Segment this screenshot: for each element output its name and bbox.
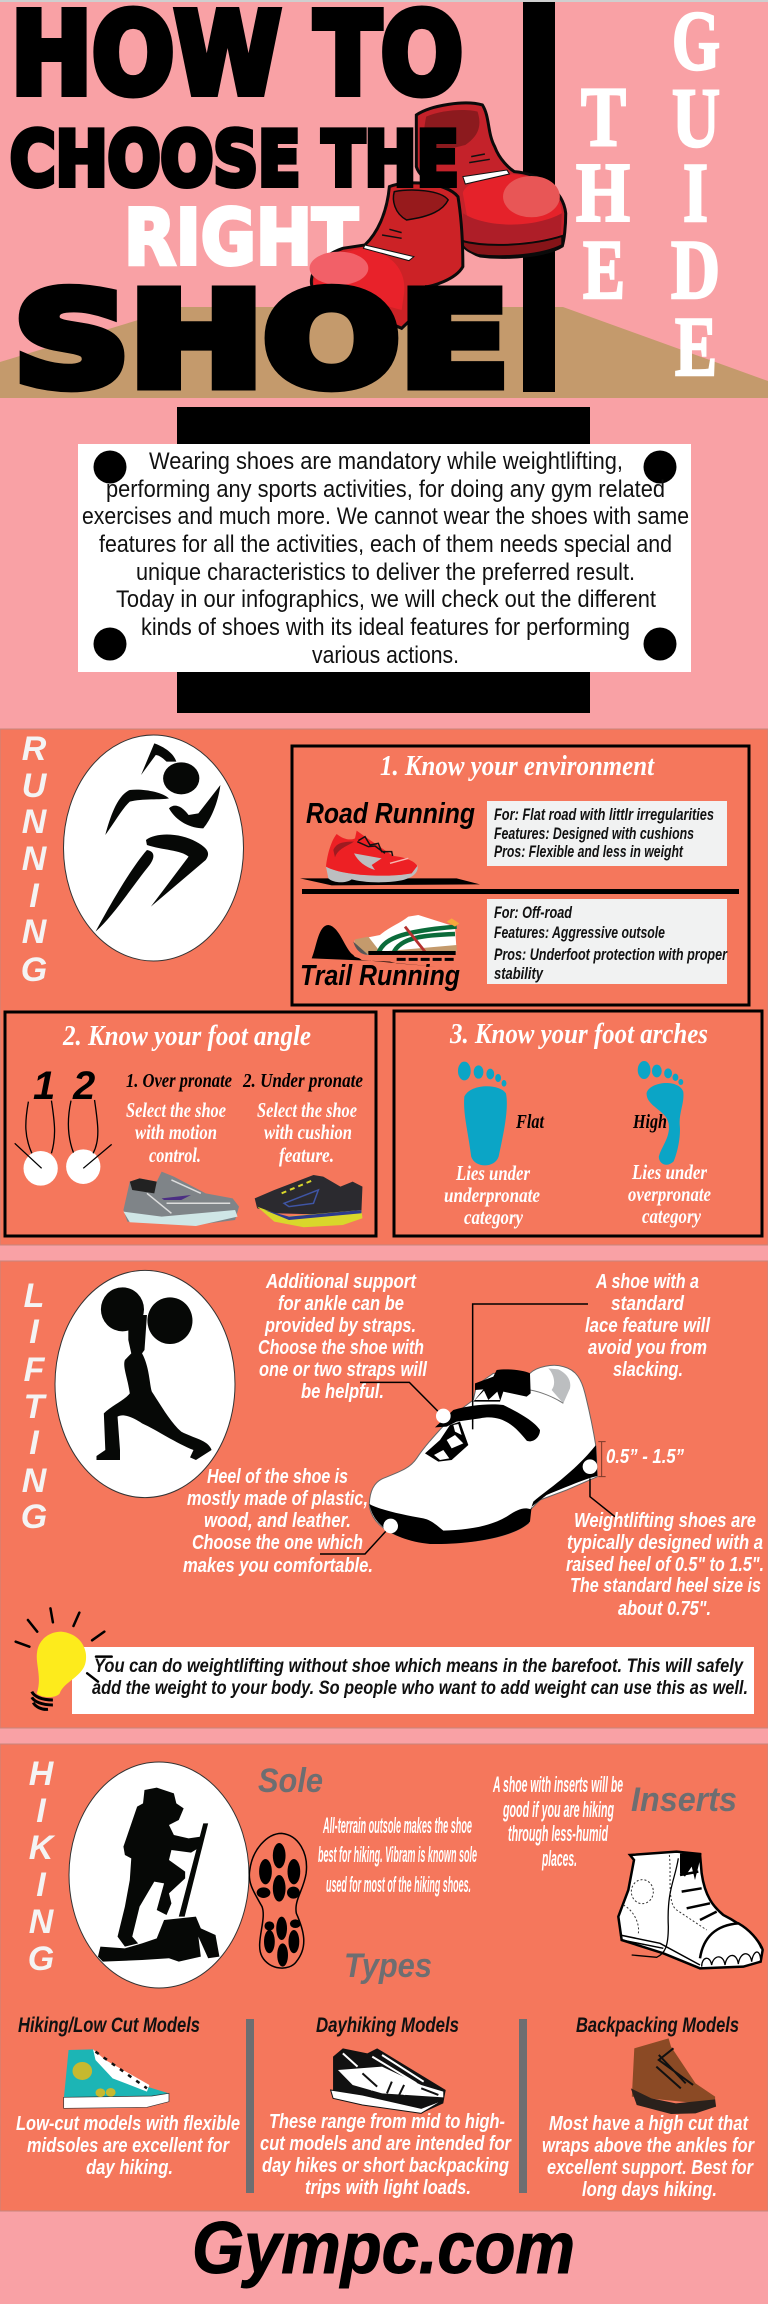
heading: guide vertical [671,0,720,394]
over pronate column [126,1070,232,1167]
trail running info: For: Off-road [494,903,572,922]
icon: hiker [69,1762,249,1988]
icon: red road shoe [300,831,480,885]
divider [246,2019,254,2193]
column: dayhiking models [260,2014,512,2199]
heel note [183,1466,373,1577]
heading: running vertical: N [22,840,48,878]
strap note: provided by straps. [264,1315,416,1337]
icon: white trail shoe [353,915,459,959]
lace note: avoid you from [588,1337,707,1359]
heading: lifting vertical: I [29,1424,40,1462]
lace note: lace feature will [585,1315,710,1337]
heading: 2. Know your foot angle [62,1021,311,1052]
column: dayhiking models: trips with light loads. [305,2177,471,2199]
raised heel note: about 0.75". [618,1598,711,1620]
under pronate column: with cushion [264,1120,352,1144]
heel note: wood, and leather. [204,1510,351,1532]
heading: guide vertical: I [683,146,708,240]
road running info: Pros: Flexible and less in weight [494,842,684,861]
under pronate column: feature. [279,1143,334,1167]
icon: flat foot [458,1062,507,1165]
numerals: 1 [33,1064,55,1108]
heading: lifting vertical [21,1277,48,1536]
high caption: category [642,1204,702,1228]
icon: high arch foot [638,1061,683,1165]
column: dayhiking models: Dayhiking Models [316,2014,459,2037]
strap note: Additional support [265,1271,417,1293]
heading: running vertical: U [22,767,48,805]
heading: the vertical: T [581,70,626,164]
flat caption [444,1161,540,1229]
under pronate column: 2. Under pronate [242,1070,363,1092]
column: dayhiking models: cut models and are intended for [260,2133,512,2155]
intro text: various actions. [312,642,459,669]
column: backpacking models: long days hiking. [582,2179,717,2201]
lace note: slacking. [613,1359,683,1381]
black backing [177,407,590,713]
icon: lifting shoe with callouts [320,1304,615,1554]
intro text: performing any sports activities, for doing any gym related [106,476,665,503]
heading: hiking vertical: I [36,1792,47,1830]
inserts text [493,1772,623,1871]
numerals [33,1064,95,1108]
intro text: features for all the activities, each of them needs special and [99,531,672,558]
ground [0,307,768,398]
strap note: be helpful. [301,1381,384,1403]
divider [519,2019,527,2193]
heading: the vertical: H [576,146,630,240]
high caption [628,1160,711,1228]
trail running info [487,899,728,984]
heel note: Choose the one which [192,1532,363,1554]
icon: hill [312,925,437,967]
footer: brand: Gympc.com [192,2208,575,2289]
under pronate column [242,1070,363,1167]
icon: red shoes [310,103,566,328]
heel note: makes you comfortable. [183,1555,373,1577]
flat caption: category [464,1205,524,1229]
heading: running vertical: N [22,913,48,951]
icon: weightlifter [55,1270,235,1498]
intro text [82,448,689,669]
heading: running vertical: N [22,803,48,841]
road running info: Features: Designed with cushions [494,824,694,843]
callout: barefoot tip [72,1647,754,1714]
heading: the vertical: E [583,223,625,317]
panel: know your foot arches [394,1011,762,1236]
heading: sole: Sole [258,1762,323,1800]
dots [94,450,676,660]
strap note: Choose the shoe with [258,1337,424,1359]
over pronate column: 1. Over pronate [126,1070,232,1092]
heading: lifting vertical: L [24,1277,44,1315]
heading: running vertical: G [21,951,47,989]
heading: inserts: Inserts [631,1781,737,1819]
intro text: unique characteristics to deliver the preferred result. [136,559,635,586]
intro text: Today in our infographics, we will check out the different [116,586,656,613]
strap note: one or two straps will [259,1359,427,1381]
raised heel note [566,1510,764,1620]
heading: lifting vertical: T [24,1388,48,1426]
heading: running vertical [21,730,48,989]
panel: hiking: used for most of the hiking shoes. [326,1872,471,1897]
icon: runner [64,735,244,961]
icon: brown boot [631,2038,716,2114]
heading: running vertical: I [29,877,40,915]
heel note: Heel of the shoe is [207,1466,348,1488]
column: dayhiking models: These range from mid to high- [269,2111,505,2133]
column: low cut models: Low-cut models with flexible [16,2113,240,2135]
numerals: 2 [72,1064,95,1108]
strap note: for ankle can be [278,1293,404,1315]
column: low cut models: Hiking/Low Cut Models [18,2014,200,2037]
heading: lifting vertical: G [21,1498,47,1536]
panel: hiking: best for hiking. Vibram is known sole [318,1842,477,1867]
panel: know your foot angle [5,1012,376,1236]
flat caption: Lies under [455,1161,531,1185]
panel: hiking: All-terrain outsole makes the shoe [323,1813,472,1838]
heading: guide vertical: U [672,71,720,165]
lace note: standard [611,1293,685,1315]
column: backpacking models [542,2014,755,2201]
icon: white boot [618,1852,763,1968]
inserts text: places. [542,1846,577,1871]
icon: teal sneaker [64,2049,169,2108]
icon: light bulb [16,1608,112,1709]
trail running info: stability [494,964,544,983]
column: low cut models: day hiking. [86,2157,173,2179]
heading: lifting vertical: I [29,1313,40,1351]
flat caption: underpronate [444,1183,540,1207]
lace note: A shoe with a [595,1271,699,1293]
trail running info: Features: Aggressive outsole [494,923,665,942]
road running info [487,801,727,866]
column: low cut models: midsoles are excellent for [27,2135,230,2157]
heading: guide vertical: D [671,223,720,317]
heading: shoe: SHOE [14,266,509,416]
high caption: Lies under [631,1160,708,1184]
vertical bar [523,2,555,392]
panel: header [0,0,768,416]
lace note [585,1271,710,1381]
intro text: kinds of shoes with its ideal features for performing [141,614,630,641]
sole text [318,1813,477,1897]
high caption: overpronate [628,1182,711,1206]
heading: hiking vertical: K [29,1829,56,1867]
heading: lifting vertical: F [24,1351,46,1389]
heading: hiking vertical [28,1755,56,1978]
column: dayhiking models: day hikes or short backpacking [262,2155,509,2177]
heading: right: RIGHT [124,194,358,283]
heel note: mostly made of plastic, [187,1488,368,1510]
divider [302,889,739,894]
road running title: Road Running [306,798,475,830]
label: high: High [632,1111,667,1133]
icon: black and yellow shoe [255,1175,362,1227]
heading: choose the: CHOOSE THE [10,115,459,203]
label: flat: Flat [515,1111,545,1133]
panel: lifting [0,1261,768,1728]
over pronate column: control. [149,1143,201,1167]
panel: running [0,729,768,1245]
strap note [258,1271,427,1403]
panel: introduction [78,407,691,713]
icon: sole tread [249,1833,306,1968]
heading: hiking vertical: H [29,1755,55,1793]
panel: hiking: A shoe with inserts will be [493,1772,623,1797]
heel height label: 0.5” - 1.5” [606,1446,684,1468]
inserts text: good if you are hiking [503,1797,614,1822]
icon: ankle diagram [15,1100,112,1186]
heading: the vertical [576,70,630,317]
heading: running vertical: R [22,730,47,768]
panel: hiking [0,1744,768,2211]
over pronate column: Select the shoe [126,1098,226,1122]
under pronate column: Select the shoe [257,1098,357,1122]
icon: grey shoe [123,1172,239,1226]
heading: guide vertical: E [675,300,717,394]
heading: types: Types [344,1947,432,1985]
heading: hiking vertical: I [36,1866,47,1904]
white card [78,444,691,672]
heading: hiking vertical: N [29,1903,55,1941]
trail running title: Trail Running [300,960,460,992]
heading: 3. Know your foot arches [449,1019,708,1050]
inserts text: through less-humid [508,1821,608,1846]
heading: lifting vertical: N [22,1462,48,1500]
heading: hiking vertical: G [28,1940,54,1978]
heading: 1. Know your environment [380,751,655,782]
icon: dayhiking shoe [331,2048,446,2113]
intro text: Wearing shoes are mandatory while weightlifting, [149,448,623,475]
panel: know your environment [292,746,749,1005]
over pronate column: with motion [135,1120,217,1144]
intro text: exercises and much more. We cannot wear the shoes with same [82,503,689,530]
column: low cut models [16,2014,240,2179]
